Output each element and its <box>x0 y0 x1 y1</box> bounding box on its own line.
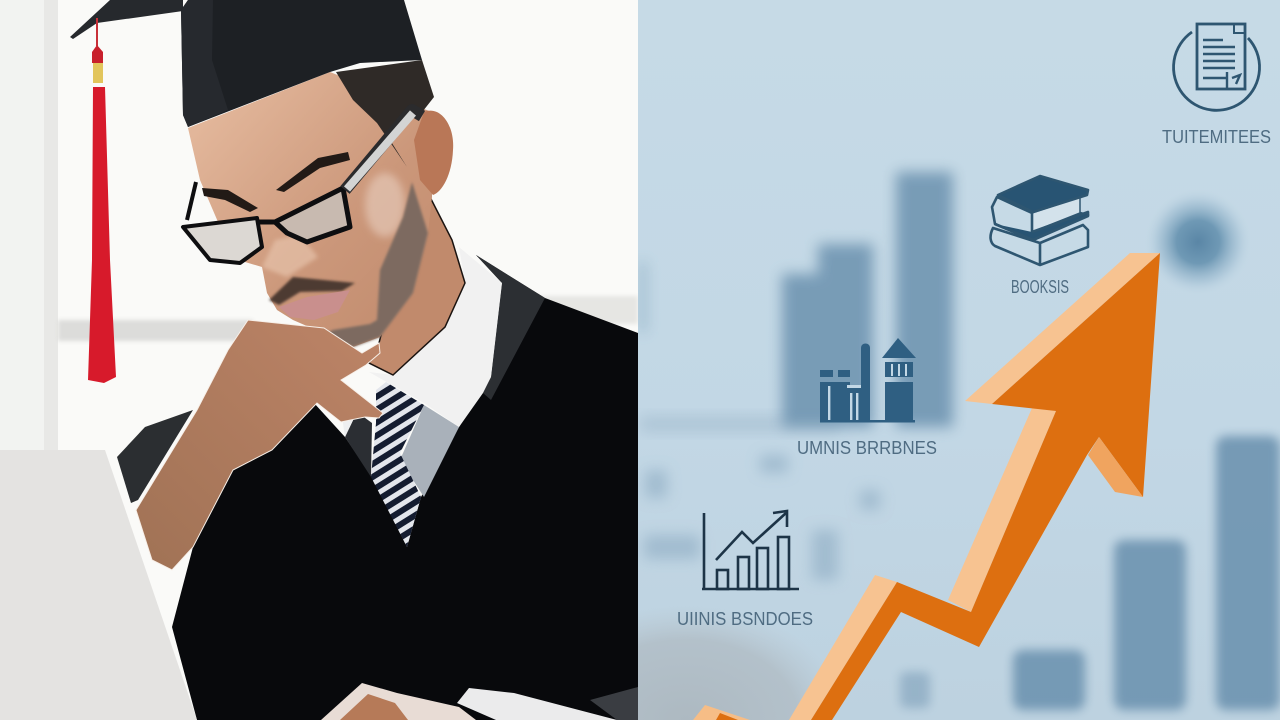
beard <box>327 182 428 347</box>
arrow light faces <box>789 253 1160 720</box>
arrow: rising orange growth arrow <box>693 253 1160 720</box>
label: buildings icon: UMNIS BRRBNES <box>797 438 937 458</box>
panel: blurred chart background <box>638 0 1280 720</box>
neck <box>369 197 465 375</box>
hair <box>336 60 434 167</box>
label: books icon: BOOKSIS <box>1011 277 1069 297</box>
icon: stacked books <box>991 176 1088 265</box>
face <box>188 60 453 347</box>
lips <box>279 290 350 320</box>
glasses <box>183 110 422 263</box>
arrow tail fragment <box>693 705 750 720</box>
label: document icon: TUITEMITEES <box>1162 127 1271 147</box>
icon: growth chart <box>702 511 799 589</box>
nose <box>262 235 318 277</box>
laptop <box>0 450 197 720</box>
arrow orange body <box>811 253 1160 720</box>
moustache <box>269 277 355 305</box>
blurred smudges <box>644 455 880 580</box>
gown <box>117 255 638 720</box>
shirt and collar <box>338 247 502 497</box>
lower hand and cuff <box>321 683 638 720</box>
tassel <box>88 18 116 383</box>
blurred bars <box>640 172 953 427</box>
label: chart icon: UIINIS BSNDOES <box>677 609 813 629</box>
panel: graduate photo <box>0 0 638 720</box>
icon: university buildings <box>820 338 916 422</box>
icon: document in circle <box>1174 24 1260 110</box>
eyebrows <box>202 152 350 212</box>
cheek highlight <box>365 173 405 237</box>
blurred circle <box>1152 196 1244 288</box>
striped tie <box>371 382 424 547</box>
hand on chin <box>136 320 383 570</box>
arrow barb shade <box>1088 437 1143 497</box>
ear <box>414 111 453 195</box>
cap <box>70 0 422 127</box>
